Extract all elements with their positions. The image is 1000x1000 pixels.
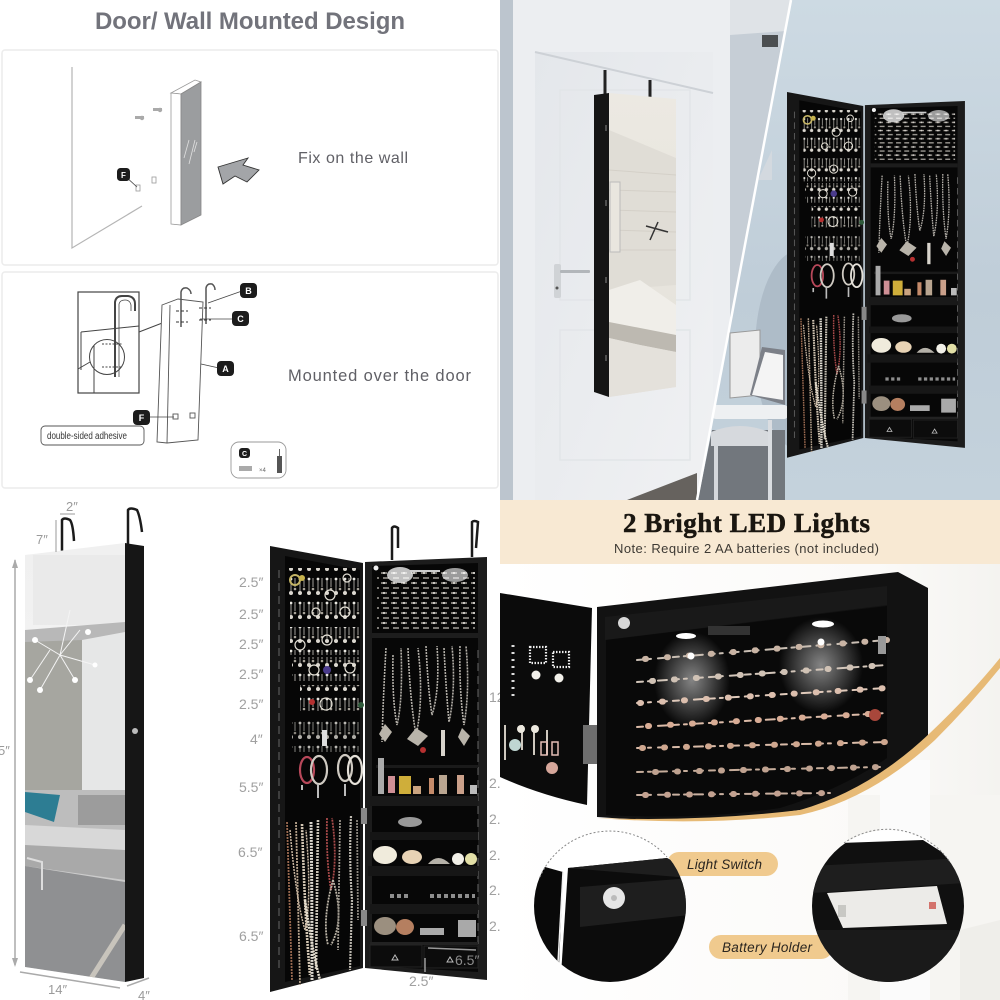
board diagram A [157,284,215,443]
dimension: 7 inch: 7″ [36,532,48,547]
detail inset [78,292,184,393]
hardware box: C [242,451,247,458]
wall screws [135,108,162,191]
door handle [554,264,590,298]
hardware box [231,442,286,478]
dimension arrows bottom [425,948,476,972]
dimension labels left: 5.5″ [239,779,263,795]
callout: battery holder [709,935,833,959]
callout: light switch [667,852,778,876]
panel: fix on the wall [2,50,498,265]
panel: 2 bright LED lights [500,500,1000,1000]
callout F lower [133,410,174,425]
caption: fix on the wall: Fix on the wall [298,150,408,167]
callout F lower: F [139,413,145,423]
dimension labels left: 2.5″ [239,666,263,682]
mirror reflection [609,90,677,400]
dimension labels right [409,689,505,989]
right cabinet body [597,572,928,820]
cabinet side [125,543,144,982]
wall scene [690,0,1000,500]
wall outline [72,67,142,248]
dimension labels right: 2. [489,918,501,934]
header band [500,500,1000,564]
label: double-sided adhesive: double-sided adhesive [47,431,127,442]
dimension: 14 inch [20,972,120,997]
closed mirror cabinet [25,508,144,985]
panel: door and wall mounted design [2,8,498,488]
ring rows [637,640,887,795]
photo: cabinet on door and wall [500,0,1000,502]
callout F [117,168,137,187]
callout F: F [121,171,126,180]
label: double-sided adhesive [41,426,144,445]
dimension: 14 inch: 14″ [48,982,67,997]
callout B: B [245,286,252,296]
heading: 2 Bright LED Lights [623,508,870,538]
dimension: 2 inch: 2″ [66,499,78,514]
open jewelry cabinet [270,521,487,992]
cabinet side [594,93,609,397]
dimension labels left: 2.5″ [239,636,263,652]
dimension: 4 inch [127,978,150,1000]
picture frames [730,330,785,405]
note: Note: Require 2 AA batteries (not included) [614,541,879,556]
dimension labels left: 2.5″ [239,606,263,622]
pearl earrings [505,645,569,774]
hinge [583,725,613,764]
callout C [200,311,249,326]
cabinet close-up [500,572,928,820]
LED lights [654,617,863,728]
dimension labels right: 2.5″ [409,973,433,989]
dimension: height [0,559,18,967]
arrow toward wall [218,158,259,184]
diagonal divider [697,0,791,500]
dimension labels right: 2. [489,847,501,863]
panel: mounted over the door [2,272,498,488]
dimension: 7 inch [36,520,56,552]
dimension labels left: 4″ [250,731,263,747]
dimension labels right: 6.5″ [455,952,479,968]
inset: battery holder [812,828,964,982]
dimension labels right: 2. [489,811,501,827]
dimension labels left: 2.5″ [239,696,263,712]
panel: dimensions [0,499,505,1000]
gold swoosh [597,658,1000,821]
open cabinet on wall [787,92,965,458]
callout A [201,361,234,376]
dimension labels left: 6.5″ [238,844,262,860]
hanging hooks [605,70,650,98]
dimension: 2 inch [60,499,78,514]
mirror diagram [171,80,201,225]
switch knob [618,617,630,629]
dimension labels left [238,574,263,944]
ring interior [606,606,887,816]
callout A: A [222,364,229,374]
inset: light switch [534,830,686,982]
callout B [208,283,257,303]
door scene [500,0,800,502]
hooks [62,508,142,552]
callout: light switch: Light Switch [687,857,762,872]
left door [500,593,592,805]
dimension labels left: 2.5″ [239,574,263,590]
side table [711,405,788,500]
dimension labels right: 2. [489,775,501,791]
dimension labels left: 6.5″ [239,928,263,944]
dimension labels right: 2. [489,882,501,898]
callout: battery holder: Battery Holder [722,940,812,955]
dimension labels right: 12 [489,689,505,705]
mirror reflection [25,540,125,985]
title: door wall mounted design: Door/ Wall Mounted Design [95,8,405,35]
hardware box: ×4 [259,468,267,474]
caption: mounted over the door: Mounted over the door [288,367,472,385]
backdrop [500,564,1000,1000]
callout C: C [237,314,244,324]
